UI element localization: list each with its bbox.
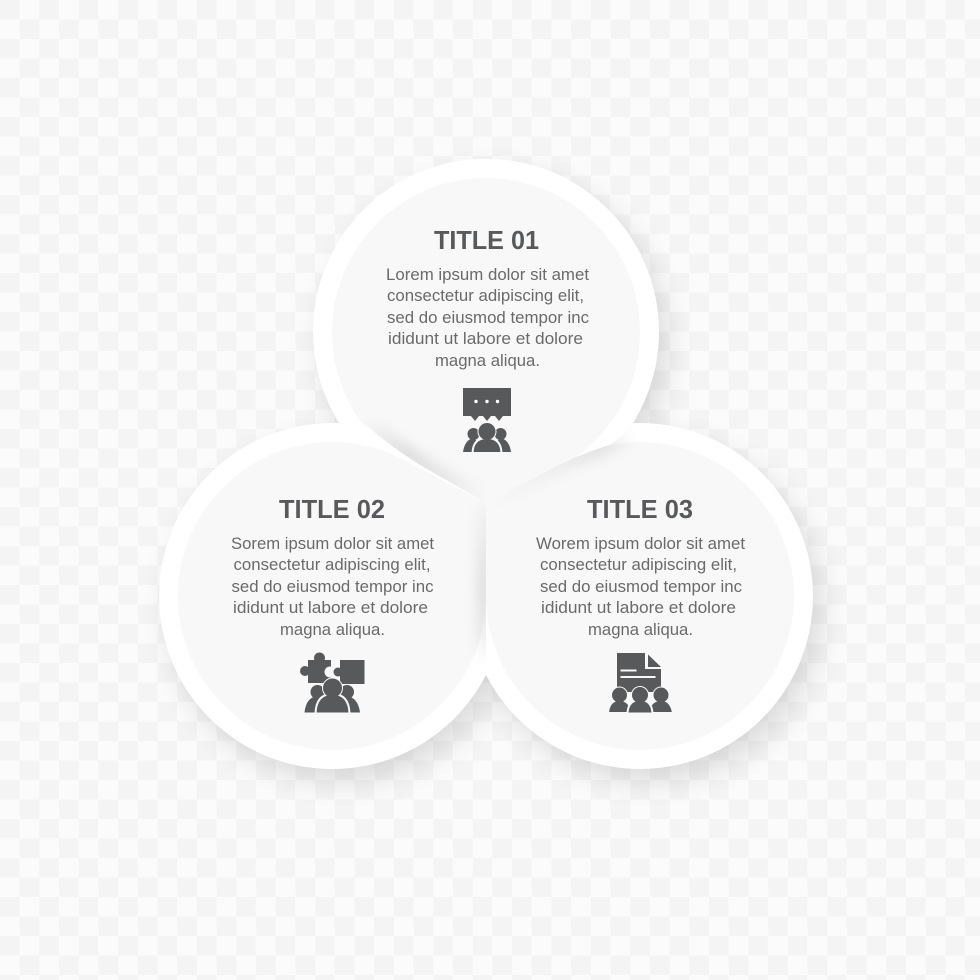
text block 01: consectetur adipiscing elit,	[387, 287, 584, 305]
icon: document and team	[608, 653, 673, 714]
text block 03: Worem ipsum dolor sit amet	[536, 535, 745, 553]
text block 02	[231, 535, 434, 639]
panel 01: top circle	[313, 159, 659, 503]
text block 02: consectetur adipiscing elit,	[234, 556, 430, 574]
title 02: TITLE 02	[279, 494, 385, 524]
text block 03: ididunt ut labore et dolore	[541, 599, 736, 617]
panel 02: left circle	[159, 423, 486, 769]
text block 02: sed do eiusmod tempor inc	[232, 578, 434, 596]
text block 01: ididunt ut labore et dolore	[388, 330, 583, 348]
shadow cast by top panel onto right panel	[552, 438, 620, 469]
text block 03: magna aliqua.	[588, 621, 693, 639]
text block 03: consectetur adipiscing elit,	[540, 556, 737, 574]
icon: speech bubble over team	[463, 388, 511, 453]
text block 01: magna aliqua.	[435, 352, 540, 370]
shadow cast by left panel onto top panel	[376, 430, 464, 490]
title 03: TITLE 03	[587, 494, 693, 524]
text block 02: ididunt ut labore et dolore	[233, 599, 428, 617]
shadow cast by right panel onto left panel	[474, 522, 486, 648]
drop shadow of the three circles	[169, 173, 821, 781]
text block 01: sed do eiusmod tempor inc	[387, 309, 589, 327]
text block 03	[536, 535, 745, 639]
icon: puzzle and team	[300, 652, 364, 714]
text block 01: Lorem ipsum dolor sit amet	[386, 266, 589, 284]
panel 03: right circle	[467, 423, 813, 769]
text block 02: Sorem ipsum dolor sit amet	[231, 535, 434, 553]
text block 01	[386, 266, 589, 370]
title 01: TITLE 01	[434, 225, 539, 255]
text block 02: magna aliqua.	[280, 621, 385, 639]
text block 03: sed do eiusmod tempor inc	[540, 578, 742, 596]
